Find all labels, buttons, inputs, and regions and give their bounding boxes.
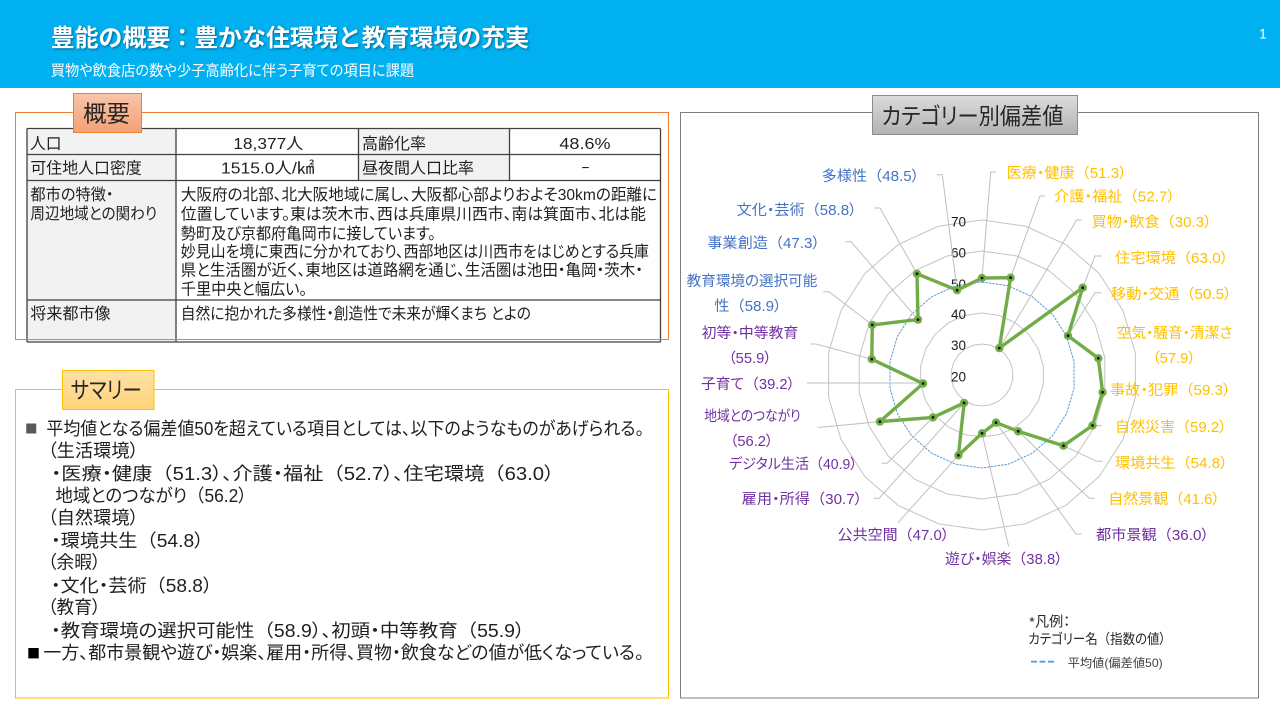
overview table <box>27 128 660 342</box>
leader lines <box>807 172 1103 547</box>
category labels: living environment (orange): 事故・犯罪（59.3） <box>1110 382 1231 399</box>
category labels: leisure and community (purple): 地域とのつながり <box>704 408 801 425</box>
subtitle: 買物や飲食店の数や少子高齢化に伴う子育ての項目に課題 <box>51 62 414 80</box>
legend <box>1028 614 1166 670</box>
row: city features: 大阪府の北部、北大阪地域に属し、大阪都心部よりおよそ30kmの距離に <box>181 186 657 204</box>
category labels: education and diversity (blue): 事業創造（47.3） <box>707 235 820 252</box>
row: future vision <box>30 305 531 323</box>
row: future vision: 自然に抱かれた多様性・創造性で未来が輝くまち とよの <box>181 305 531 323</box>
page number: 1 <box>1259 26 1267 42</box>
category labels: living environment (orange): 介護・福祉（52.7） <box>1054 188 1175 206</box>
category labels: living environment (orange): 自然景観（41.6） <box>1108 491 1220 508</box>
category labels: leisure and community (purple): デジタル生活（40.9） <box>729 455 857 473</box>
panel: category deviation radar <box>680 96 1258 698</box>
category labels: living environment (orange) <box>1007 165 1232 508</box>
category labels: leisure and community (purple): 都市景観（36.0） <box>1096 527 1209 544</box>
summary text: （生活環境） <box>48 441 139 461</box>
summary text: ・教育環境の選択可能性 （58.9）、初頭・中等教育 （55.9） <box>51 621 525 641</box>
row: population and aging: 48.6% <box>559 136 611 153</box>
category labels: living environment (orange): （57.9） <box>1152 350 1196 367</box>
row: population and aging: 高齢化率 <box>362 135 426 153</box>
summary text: ・環境共生 （54.8） <box>51 531 204 551</box>
panel: summary <box>16 370 668 698</box>
category labels: leisure and community (purple): 遊び・娯楽（38.8） <box>945 551 1063 568</box>
header band <box>0 0 1280 88</box>
average line (deviation 50) <box>890 282 1074 468</box>
axis scale labels: 20 <box>951 370 966 384</box>
row: city features: 都市の特徴・ <box>30 186 114 204</box>
axis scale labels: 50 <box>951 277 966 292</box>
row: city features: 周辺地域との関わり <box>30 205 157 223</box>
category labels: education and diversity (blue): 多様性（48.5） <box>822 167 919 185</box>
legend: 平均値(偏差値50) <box>1068 655 1163 670</box>
category labels: living environment (orange): 住宅環境（63.0） <box>1115 250 1228 267</box>
row: city features: 位置しています。東は茨木市、西は兵庫県川西市、南は箕面市、北は能 <box>181 205 646 223</box>
row: density and day-night ratio: 可住地人口密度 <box>30 159 142 177</box>
category labels: leisure and community (purple): （55.9） <box>728 350 772 367</box>
radar chart <box>687 165 1232 568</box>
category labels: leisure and community (purple): 雇用・所得（30.7） <box>742 491 862 508</box>
category labels: education and diversity (blue): 教育環境の選択可能 <box>687 273 818 290</box>
data series polyline <box>872 274 1103 455</box>
summary text: ■ <box>25 418 38 438</box>
summary text <box>25 418 644 663</box>
badge: summary heading <box>62 370 154 410</box>
category labels: leisure and community (purple): （56.2） <box>730 433 773 450</box>
category labels: education and diversity (blue): 性（58.9） <box>714 298 782 315</box>
summary text: 地域とのつながり（56.2） <box>56 486 247 506</box>
row: city features <box>30 186 657 298</box>
title: 豊能の概要：豊かな住環境と教育環境の充実 <box>51 25 529 52</box>
badge: summary heading: サマリー <box>71 377 142 403</box>
badge: overview heading <box>74 94 142 132</box>
row: population and aging: 18,377人 <box>233 136 304 153</box>
category labels: living environment (orange): 空気・騒音・清潔さ <box>1117 325 1232 342</box>
axis scale labels: 70 <box>951 214 966 230</box>
category labels: education and diversity (blue): 文化・芸術（58.8） <box>737 202 857 219</box>
badge: radar heading <box>872 96 1078 134</box>
category labels: leisure and community (purple): 公共空間（47.0） <box>838 527 949 544</box>
legend: カテゴリー名（指数の値） <box>1028 631 1166 647</box>
row: density and day-night ratio: 1515.0人/㎢ <box>221 159 314 177</box>
summary text: 平均値となる偏差値50を超えている項目としては、以下のようなものがあげられる。 <box>46 419 644 439</box>
summary text: （自然環境） <box>48 508 139 528</box>
category labels: education and diversity (blue) <box>687 167 919 315</box>
category labels: living environment (orange): 環境共生（54.8） <box>1115 455 1228 472</box>
category labels: living environment (orange): 買物・飲食（30.3） <box>1092 214 1212 231</box>
summary text: （余暇） <box>48 552 101 572</box>
category labels: living environment (orange): 自然災害（59.2） <box>1115 419 1227 436</box>
summary text: （教育） <box>48 598 101 618</box>
category labels: leisure and community (purple): 子育て（39.2） <box>701 376 795 393</box>
row: density and day-night ratio: － <box>581 160 590 177</box>
axis scale labels <box>951 214 966 384</box>
category labels: leisure and community (purple): 初等・中等教育 <box>702 324 798 342</box>
row: population and aging <box>30 135 611 153</box>
summary text: ・文化・芸術 （58.8） <box>51 576 212 596</box>
badge: radar heading: カテゴリー別偏差値 <box>882 103 1064 129</box>
category labels: living environment (orange): 移動・交通（50.5） <box>1111 286 1232 303</box>
row: city features: 妙見山を境に東西に分かれており、西部地区は川西市をはじめとする兵庫 <box>181 243 649 261</box>
data markers <box>868 270 1107 459</box>
row: density and day-night ratio <box>30 159 590 177</box>
row: city features: 勢町及び京都府亀岡市に接しています。 <box>181 225 436 243</box>
axis scale labels: 60 <box>951 246 966 260</box>
row: city features: 千里中央と幅広い。 <box>181 280 307 298</box>
row: city features: 県と生活圏が近く、東地区は道路網を通じ、生活圏は池田・亀岡・茨木・ <box>181 261 643 279</box>
row: density and day-night ratio: 昼夜間人口比率 <box>362 159 474 177</box>
row: future vision: 将来都市像 <box>30 305 111 323</box>
axis scale labels: 30 <box>951 338 966 353</box>
badge: overview heading: 概要 <box>83 100 130 126</box>
summary text: 一方、都市景観や遊び・娯楽、雇用・所得、買物・飲食などの値が低くなっている。 <box>43 643 644 663</box>
panel: overview <box>16 94 668 342</box>
summary text: ■ <box>27 643 40 662</box>
category labels: leisure and community (purple) <box>701 324 1209 568</box>
category labels: living environment (orange): 医療・健康（51.3） <box>1007 165 1127 182</box>
axis scale labels: 40 <box>951 307 966 322</box>
legend: *凡例： <box>1029 614 1070 630</box>
summary text: ・医療・健康 （51.3）、介護・福祉 （52.7）、住宅環境 （63.0） <box>51 464 554 484</box>
radar grid rings <box>829 220 1135 530</box>
row: population and aging: 人口 <box>30 136 62 153</box>
